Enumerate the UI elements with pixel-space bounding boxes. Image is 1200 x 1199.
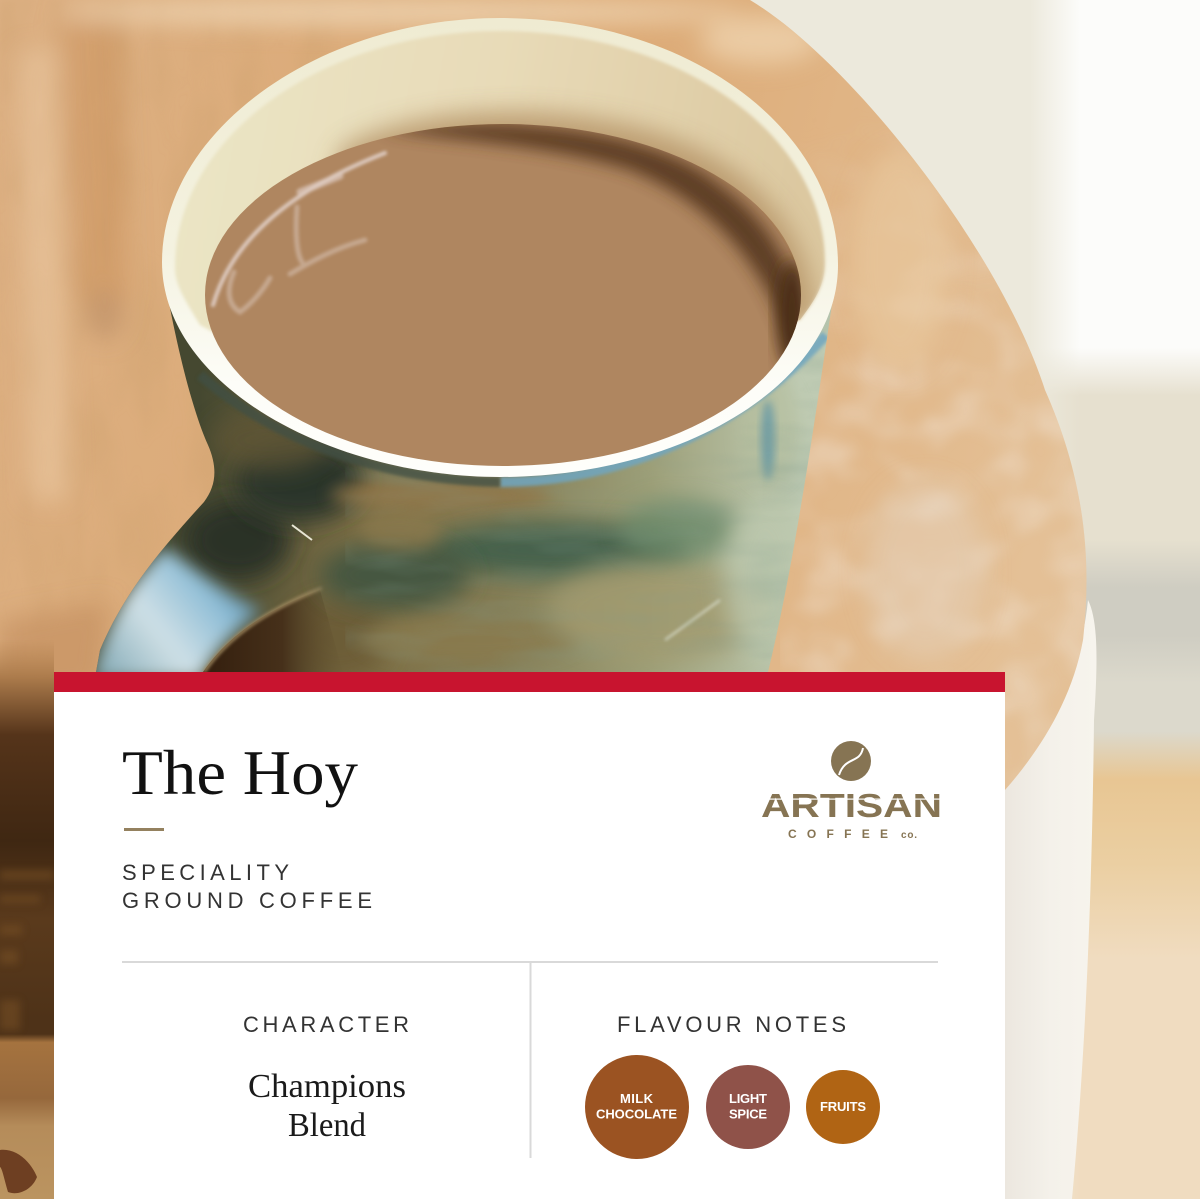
white stool side: [1005, 600, 1096, 1199]
logo wordmark: COFFEE: [788, 827, 888, 841]
handle inner hole: [203, 592, 326, 672]
glaze patches: [330, 479, 550, 511]
mug rim: [162, 18, 838, 477]
logo wordmark: [761, 787, 942, 841]
reflection: [213, 153, 385, 312]
dark wood lower left: [0, 640, 54, 1199]
vertical divider: [530, 963, 532, 1158]
flavour bubble: light spice: [706, 1065, 790, 1149]
mug interior: [174, 30, 827, 334]
flavour bubble: light spice: SPICE: [729, 1106, 767, 1122]
horizontal divider: [122, 961, 938, 963]
logo wordmark: co.: [901, 830, 917, 841]
title: The Hoy: [122, 738, 359, 808]
flavour bubble: fruits: FRUITS: [820, 1099, 866, 1114]
blue rim shadow: [500, 335, 826, 482]
title dash: [124, 828, 164, 831]
subtitle: GROUND COFFEE: [122, 888, 372, 913]
logo: [761, 741, 942, 841]
character value: [248, 1068, 406, 1144]
flavour notes heading: FLAVOUR NOTES: [617, 1012, 846, 1037]
mug body and handle: [92, 270, 850, 680]
wooden stool top: [0, 0, 1086, 790]
coffee surface: [205, 123, 807, 466]
flavour bubble: fruits: [806, 1070, 880, 1144]
flavour bubble: milk chocolate: CHOCOLATE: [596, 1106, 677, 1122]
subtitle: [122, 860, 372, 913]
character value: Champions: [248, 1068, 406, 1105]
icon: coffee bean: [831, 741, 871, 781]
red stripe: [54, 672, 1005, 692]
logo wordmark: ARTISAN: [761, 787, 942, 824]
flavour bubble: milk chocolate: MILK: [620, 1091, 654, 1106]
handle blue glaze: [92, 548, 262, 680]
character heading: CHARACTER: [243, 1012, 409, 1037]
subtitle: SPECIALITY: [122, 860, 289, 885]
card: [54, 672, 1005, 1199]
flavour bubble: milk chocolate: [585, 1055, 689, 1159]
upper handle patch: [186, 500, 290, 580]
flavour bubble: light spice: LIGHT: [729, 1091, 767, 1106]
character value: Blend: [288, 1107, 366, 1144]
